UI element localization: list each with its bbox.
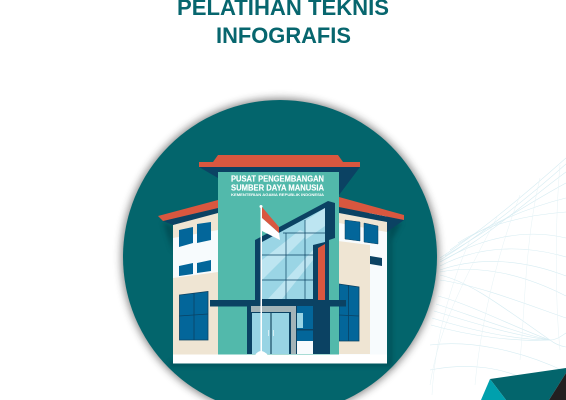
background wave mesh — [430, 158, 566, 382]
tower sign text: PUSAT PENGEMBANGAN — [231, 174, 324, 184]
faint mesh cross lines — [430, 165, 560, 395]
dark column — [313, 306, 330, 354]
tower sign text: KEMENTERIAN AGAMA REPUBLIK INDONESIA — [231, 192, 324, 197]
building shadow — [163, 222, 402, 366]
title: INFOGRAFIS — [216, 23, 351, 48]
left wing — [158, 200, 218, 355]
building — [158, 155, 404, 366]
tower sign text: SUMBER DAYA MANUSIA — [231, 184, 324, 192]
circle shadow — [121, 98, 439, 400]
glass atrium — [255, 201, 335, 306]
horizontal canopy band — [210, 300, 346, 306]
white base — [173, 354, 387, 364]
left large window — [179, 292, 208, 340]
corner decoration — [481, 368, 566, 400]
right wing — [330, 197, 404, 355]
right large window — [339, 284, 359, 341]
central tower — [218, 172, 339, 355]
main roof — [199, 155, 360, 195]
side panel — [297, 306, 313, 354]
flag and pole — [255, 205, 280, 355]
tower sign text — [231, 174, 324, 197]
entrance door — [247, 306, 297, 354]
teal circle — [123, 100, 437, 400]
title — [177, 0, 389, 48]
